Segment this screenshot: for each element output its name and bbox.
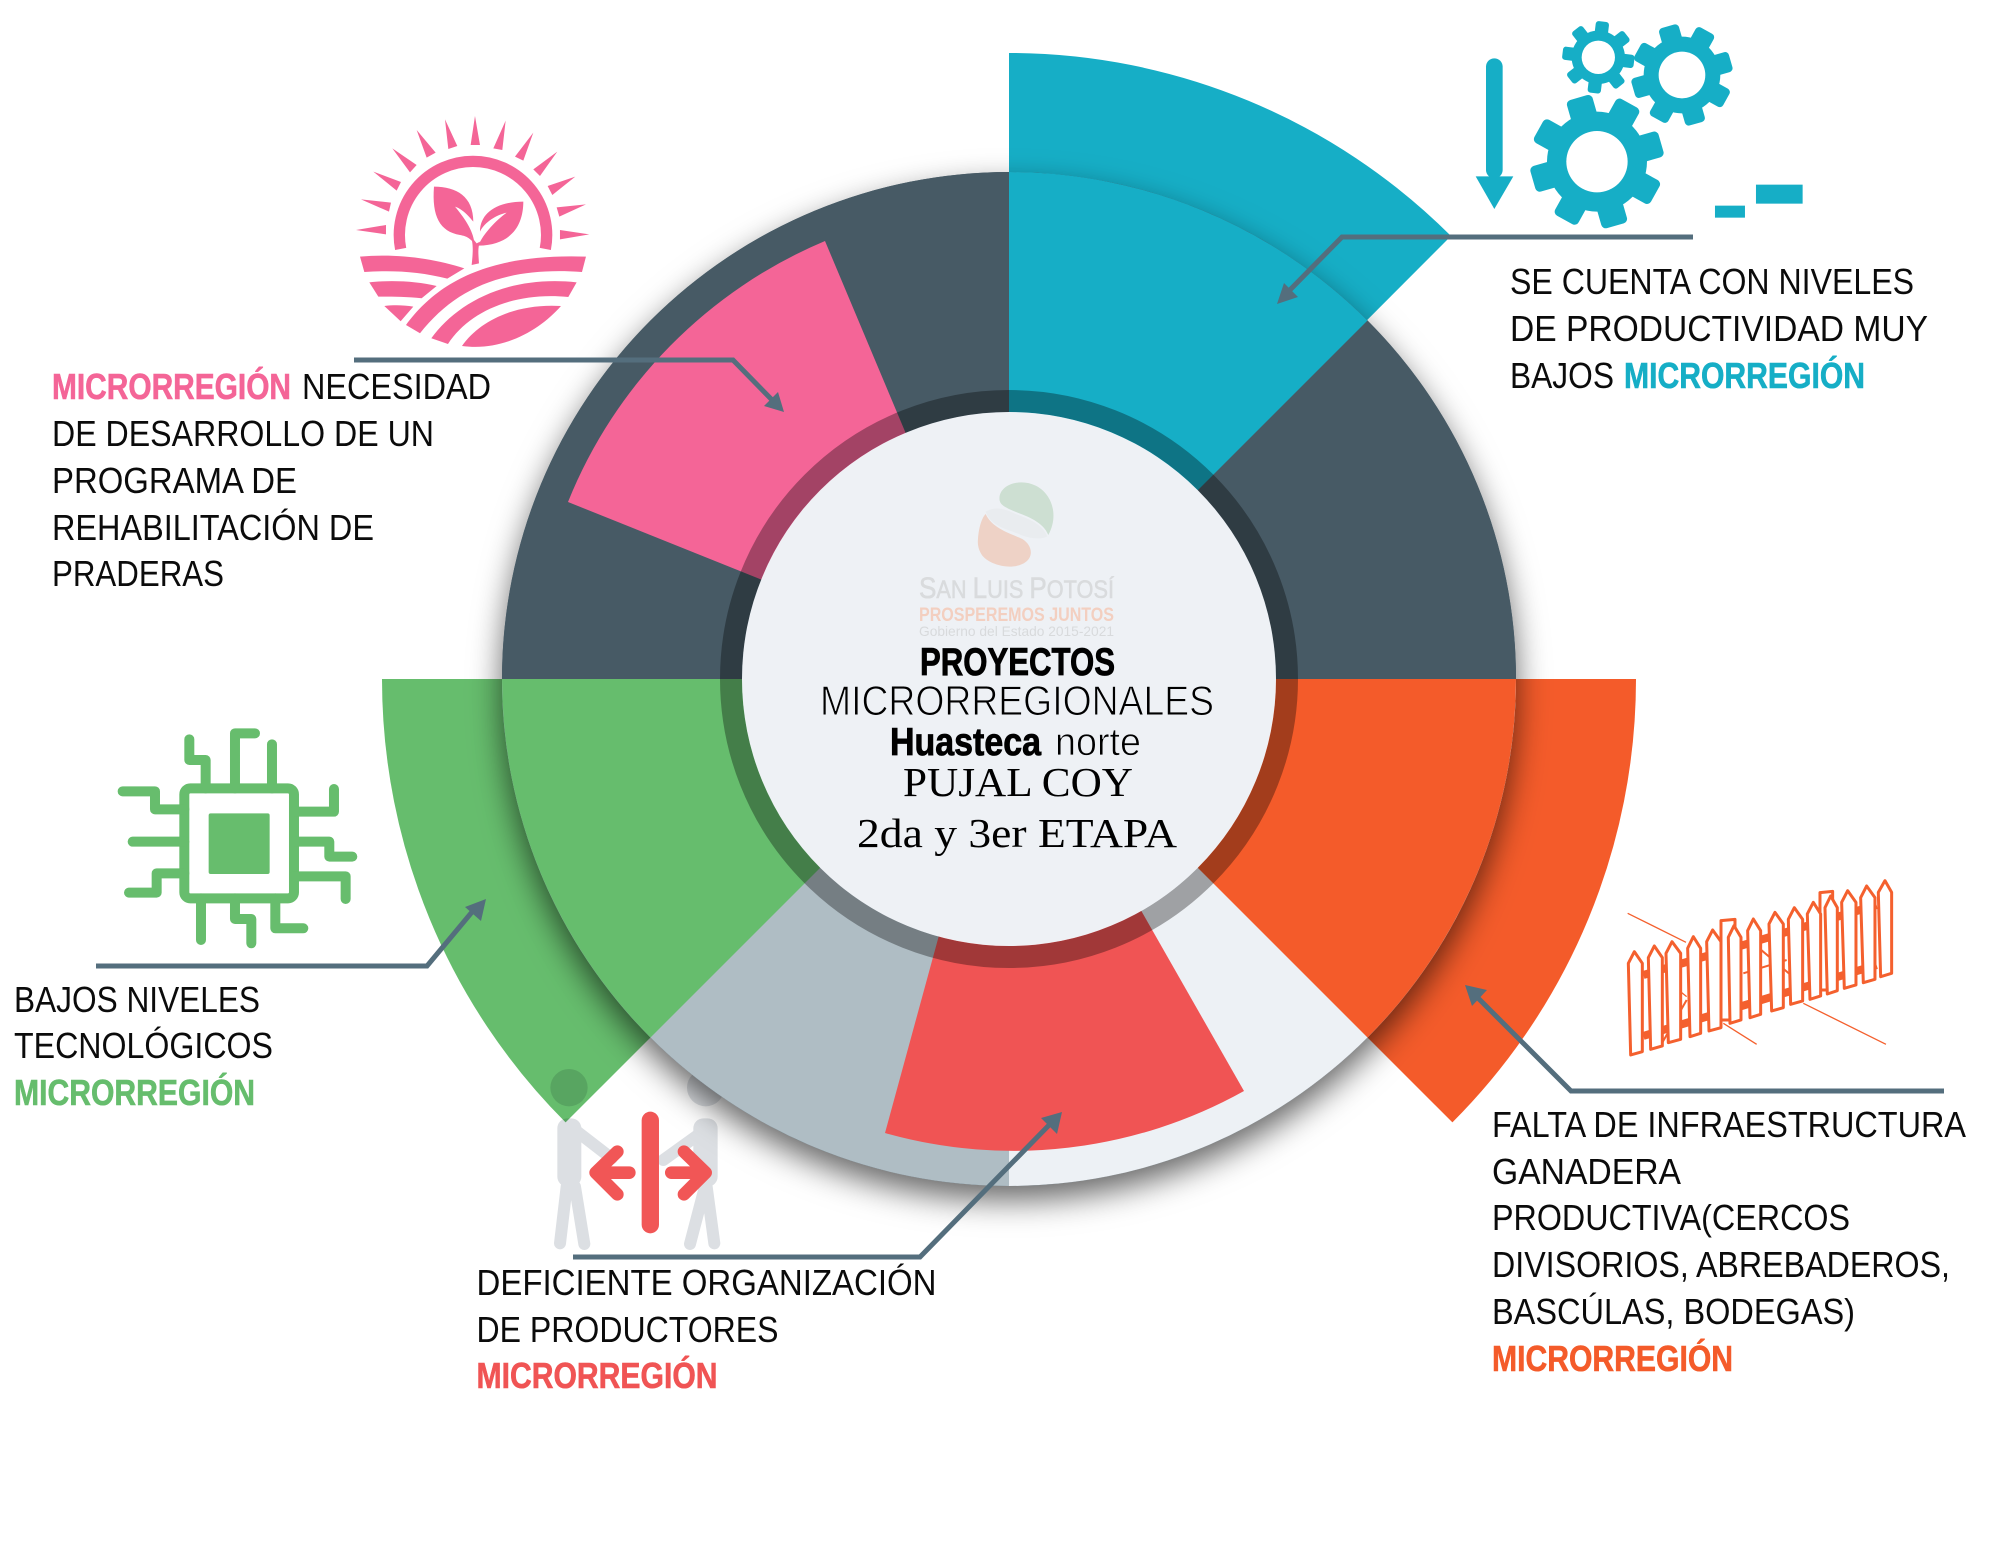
icon: gears and falling arrow (1476, 21, 1803, 229)
text: green microrregión: MICRORREGIÓN (14, 1071, 255, 1113)
icon: red separation arrows (596, 1112, 706, 1233)
text: red microrregión (476, 1262, 936, 1396)
text: red microrregión: DE PRODUCTORES (476, 1309, 778, 1350)
panel: pink wedge (568, 241, 1009, 679)
text: pink microrregión: REHABILITACIÓN DE (52, 507, 374, 548)
title: proyectos microrregionales: norte (1055, 721, 1141, 764)
leader arrow: green (96, 899, 486, 966)
text: green microrregión: BAJOS NIVELES (14, 979, 260, 1020)
text: pink microrregión: NECESIDAD (302, 366, 491, 407)
text: red microrregión: MICRORREGIÓN (476, 1354, 718, 1396)
panel: central disc with shadow (502, 172, 1516, 1186)
panel: green outer wedge (382, 679, 1009, 1122)
text: pink microrregión: PRADERAS (52, 553, 224, 594)
text: orange microrregión: PRODUCTIVA(CERCOS (1492, 1197, 1850, 1238)
leader arrow: orange (1465, 985, 1944, 1091)
panel: orange inner wedge (1009, 679, 1516, 1038)
text: orange microrregión: DIVISORIOS, ABREBADEROS, (1492, 1244, 1950, 1285)
panel: teal outer wedge (1009, 53, 1451, 679)
title: proyectos microrregionales: 2da y 3er ETAPA (857, 810, 1177, 856)
icon: fence (1628, 881, 1892, 1055)
logo: San Luis Potosí (919, 482, 1114, 639)
text: green microrregión: TECNOLÓGICOS (14, 1025, 273, 1066)
leader arrow: teal (1277, 237, 1693, 304)
text: green microrregión (14, 979, 273, 1113)
text: pink microrregión: DE DESARROLLO DE UN (52, 413, 434, 454)
logo text: SAN LUIS POTOSÍ (919, 572, 1114, 605)
title: proyectos microrregionales: Huasteca (890, 721, 1041, 764)
text: orange microrregión: BASCÚLAS, BODEGAS) (1492, 1291, 1855, 1332)
logo mark (978, 482, 1053, 567)
text: teal microrregión: SE CUENTA CON NIVELES (1510, 261, 1914, 302)
leader arrow: red (573, 1112, 1062, 1257)
title: proyectos microrregionales: PUJAL COY (903, 759, 1133, 805)
panel: green inner wedge (502, 679, 1009, 1038)
icon: sun and plant (356, 116, 589, 347)
text: teal microrregión: DE PRODUCTIVIDAD MUY (1510, 308, 1928, 349)
title: proyectos microrregionales (820, 641, 1214, 856)
text: orange microrregión (1492, 1104, 1966, 1379)
text: teal microrregión: MICRORREGIÓN (1624, 354, 1865, 396)
text: pink microrregión (52, 365, 491, 594)
panel: orange outer wedge (1009, 679, 1636, 1122)
text: orange microrregión: MICRORREGIÓN (1492, 1337, 1733, 1379)
text: red microrregión: DEFICIENTE ORGANIZACIÓN (476, 1262, 936, 1303)
logo: San Luis Potosí: PROSPEREMOS JUNTOS (919, 605, 1114, 626)
text: pink microrregión: MICRORREGIÓN (52, 365, 291, 407)
title: proyectos microrregionales: PROYECTOS (920, 641, 1115, 684)
leader arrow: pink (354, 360, 784, 412)
panel: red wedge (885, 679, 1244, 1151)
icon: people separated (550, 1069, 724, 1244)
text: pink microrregión: PROGRAMA DE (52, 460, 297, 501)
title: proyectos microrregionales: MICRORREGIONALES (820, 677, 1214, 724)
text: teal microrregión (1510, 261, 1928, 396)
ring around centre (731, 401, 1287, 957)
logo: San Luis Potosí: Gobierno del Estado 2015-2021 (919, 623, 1114, 639)
text: teal microrregión: BAJOS (1510, 355, 1614, 396)
icon: microchip (123, 733, 352, 943)
text: orange microrregión: GANADERA (1492, 1151, 1681, 1192)
panel: teal inner wedge (1009, 172, 1368, 679)
panel: centre circle (742, 412, 1276, 946)
